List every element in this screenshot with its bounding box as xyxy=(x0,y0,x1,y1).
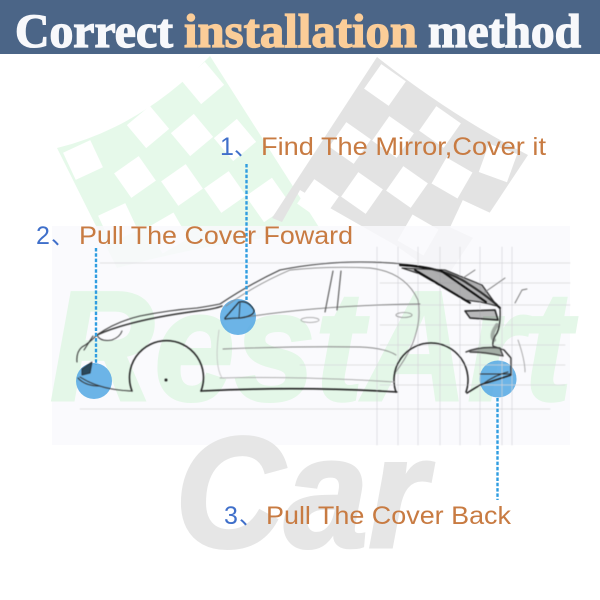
front wheel arch xyxy=(130,341,204,391)
grey checkered flag watermark xyxy=(272,57,528,280)
step 2 label: 、 xyxy=(51,223,74,249)
dotted leader lines xyxy=(96,164,498,500)
step 3 label: 3 xyxy=(224,502,238,530)
sill and belt lines xyxy=(201,389,397,392)
headlight and bumper xyxy=(82,362,92,375)
car sketch xyxy=(77,247,570,445)
watermark: RestArt: RestArt xyxy=(50,260,578,434)
step 2 label: 2 xyxy=(36,222,50,250)
step 1 label: Find The Mirror,Cover it xyxy=(261,133,546,161)
step 3 label: Pull The Cover Back xyxy=(266,502,512,530)
watermark: Car: Car xyxy=(175,405,434,581)
pillars and handles xyxy=(325,271,341,312)
rear spoiler and hatch xyxy=(400,265,500,308)
step 3 label: 、 xyxy=(239,503,262,529)
title: installation xyxy=(184,5,417,58)
title: method xyxy=(428,5,581,58)
step 2 label: Pull The Cover Foward xyxy=(79,222,353,250)
green checkered flag watermark xyxy=(57,56,322,268)
step 1 label: 、 xyxy=(234,134,257,160)
rear wheel arch xyxy=(394,343,468,392)
title xyxy=(15,5,581,58)
blue highlight circles xyxy=(76,299,516,399)
title: Correct xyxy=(15,5,173,58)
header bar xyxy=(0,0,600,54)
sketch background panel xyxy=(52,226,570,445)
body outline xyxy=(77,262,430,362)
step 1 label: 1 xyxy=(220,133,234,161)
construction grid xyxy=(80,247,570,445)
mirror xyxy=(225,302,254,319)
